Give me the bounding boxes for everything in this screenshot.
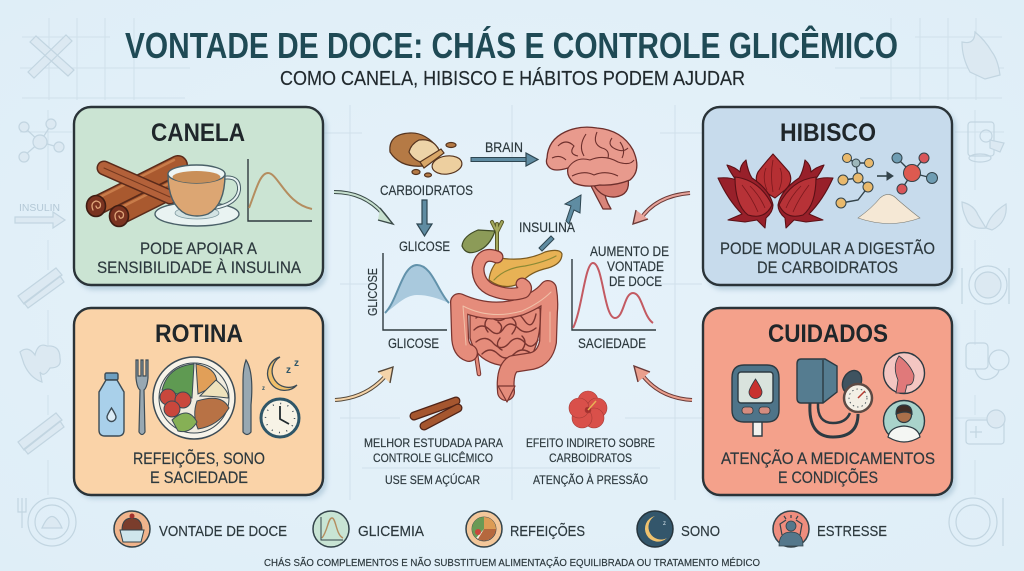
legend: sono: SONO bbox=[681, 523, 720, 540]
text: cinnamon note bbox=[364, 436, 503, 487]
legend: glicemia: GLICEMIA bbox=[358, 523, 424, 540]
text: canela caption: PODE APOIAR A bbox=[140, 239, 258, 258]
icon: digestive organs bbox=[459, 222, 562, 402]
icon: molecules bbox=[836, 153, 938, 208]
icon: clock bbox=[261, 399, 299, 437]
chart: craving curve bbox=[572, 259, 656, 330]
legend: vontade de doce bbox=[114, 511, 287, 547]
icon: moon and sleep: z bbox=[262, 386, 265, 392]
text: hibiscus note: ATENÇÃO À PRESSÃO bbox=[533, 472, 648, 487]
text: cuidados caption: E CONDIÇÕES bbox=[778, 468, 878, 487]
label: aumento de vontade de doce: DE DOCE bbox=[609, 274, 662, 289]
chart: insulin sensitivity curve bbox=[248, 159, 312, 221]
legend: refeições: REFEIÇÕES bbox=[510, 523, 585, 540]
icon: tea cup bbox=[155, 165, 239, 226]
legend: glicemia bbox=[313, 511, 424, 547]
icon: stomach bbox=[478, 255, 526, 294]
text: hibisco caption bbox=[720, 239, 935, 277]
icon: glucometer bbox=[732, 365, 779, 436]
text: rotina caption bbox=[133, 449, 265, 487]
arrow: insulin to brain bbox=[539, 195, 581, 251]
footer note: CHÁS SÃO COMPLEMENTOS E NÃO SUBSTITUEM ALIMENTAÇÃO EQUILIBRADA OU TRATAMENTO MÉDICO bbox=[264, 556, 760, 569]
label: carboidratos: CARBOIDRATOS bbox=[380, 183, 473, 198]
arrow: canela to center bbox=[334, 192, 393, 224]
arrow: bread to brain bbox=[471, 153, 538, 166]
icon: knife bbox=[243, 360, 252, 434]
icon: moon and sleep: z bbox=[294, 358, 299, 369]
arrow: rotina to center bbox=[335, 367, 393, 400]
icon: moon and sleep: z bbox=[286, 365, 291, 376]
legend: estresse: ESTRESSE bbox=[817, 523, 887, 540]
legend: estresse bbox=[773, 511, 887, 547]
label: glicose bottom: GLICOSE bbox=[388, 336, 439, 351]
text: hibisco caption: PODE MODULAR A DIGESTÃO bbox=[720, 239, 935, 258]
text: canela caption: SENSIBILIDADE À INSULINA bbox=[97, 258, 302, 277]
label: aumento de vontade de doce: AUMENTO DE bbox=[590, 244, 669, 259]
panel: cuidados bbox=[703, 308, 956, 499]
label: saciedade: SACIEDADE bbox=[578, 336, 646, 351]
icon: pancreas duct bbox=[494, 256, 556, 280]
text: cinnamon note: CONTROLE GLICÊMICO bbox=[373, 450, 493, 465]
icon: hibiscus calyces bbox=[718, 154, 833, 228]
legend: sono: z bbox=[663, 521, 666, 527]
text: hibiscus note: CARBOIDRATOS bbox=[549, 451, 632, 465]
chart: glucose curve bbox=[365, 253, 449, 330]
text: rotina caption: E SACIEDADE bbox=[150, 468, 248, 487]
text: canela caption bbox=[97, 239, 302, 277]
heading: hibisco: HIBISCO bbox=[780, 119, 876, 147]
legend: refeições bbox=[466, 511, 585, 547]
icon: water bottle bbox=[99, 373, 124, 436]
heading: canela: CANELA bbox=[151, 119, 245, 147]
icon: small cinnamon bbox=[414, 401, 458, 426]
arrow: carbs to glucose bbox=[417, 200, 432, 236]
label: glicose axis: GLICOSE bbox=[365, 268, 380, 316]
text: cuidados caption bbox=[721, 449, 935, 487]
heading: rotina: ROTINA bbox=[155, 320, 243, 348]
legend: sono bbox=[637, 511, 720, 547]
icon: gallbladder and duct bbox=[462, 222, 502, 256]
label: aumento de vontade de doce: VONTADE bbox=[607, 259, 664, 274]
icon: plate of food bbox=[153, 357, 235, 439]
heading: cuidados: CUIDADOS bbox=[768, 320, 888, 348]
text: cinnamon note: MELHOR ESTUDADA PARA bbox=[364, 436, 503, 450]
icon: pancreas bbox=[489, 250, 562, 287]
icon: doctor bbox=[884, 400, 924, 442]
icon: fork bbox=[136, 360, 148, 434]
text: rotina caption: REFEIÇÕES, SONO bbox=[133, 449, 265, 468]
subtitle: COMO CANELA, HIBISCO E HÁBITOS PODEM AJUDAR bbox=[280, 67, 745, 90]
panel: canela bbox=[74, 107, 327, 290]
icon: bread bbox=[390, 133, 463, 177]
text: hibisco caption: DE CARBOIDRATOS bbox=[757, 258, 898, 277]
icon: cinnamon sticks bbox=[86, 160, 178, 226]
icon: small intestine bbox=[470, 308, 540, 366]
label: glicose top: GLICOSE bbox=[399, 239, 450, 254]
icon: blood pressure monitor bbox=[797, 359, 872, 437]
icon: moon and sleep bbox=[262, 357, 299, 392]
icon: pregnancy bbox=[884, 352, 924, 394]
icon: hibiscus flower bbox=[569, 391, 607, 428]
icon: colon bbox=[459, 289, 551, 402]
label: insulin watermark: INSULIN bbox=[19, 203, 60, 214]
icon: brain bbox=[546, 127, 637, 209]
label: brain: BRAIN bbox=[485, 140, 523, 155]
text: cinnamon note: USE SEM AÇÚCAR bbox=[385, 472, 480, 487]
arrow: hibisco to center bbox=[633, 193, 690, 224]
panel: rotina bbox=[74, 308, 327, 499]
label: aumento de vontade de doce bbox=[590, 244, 669, 289]
legend: vontade de doce: VONTADE DE DOCE bbox=[159, 523, 287, 540]
text: hibiscus note bbox=[526, 436, 655, 487]
panel: hibisco bbox=[703, 107, 956, 290]
icon: starch powder bbox=[858, 194, 920, 224]
label: insulina: INSULINA bbox=[519, 220, 575, 235]
text: cuidados caption: ATENÇÃO A MEDICAMENTOS bbox=[721, 449, 935, 468]
text: hibiscus note: EFEITO INDIRETO SOBRE bbox=[526, 436, 655, 450]
arrow: cuidados to center bbox=[634, 366, 692, 400]
